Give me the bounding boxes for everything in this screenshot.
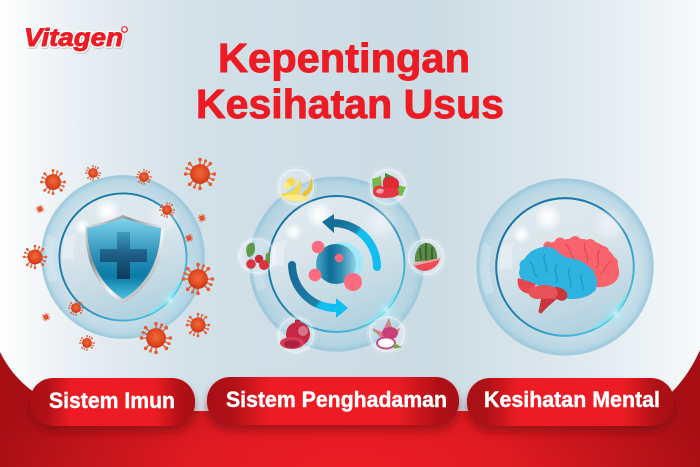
panel: mental health bbox=[477, 179, 653, 355]
brain: blue lobe bbox=[519, 247, 597, 299]
bubble: immune bbox=[42, 176, 204, 338]
icons: virus particles bbox=[23, 158, 216, 354]
label pill: Sistem Imun bbox=[30, 378, 195, 432]
logo: Vitagen: Vitagen bbox=[24, 24, 123, 52]
brain: red base and cerebellum bbox=[518, 278, 567, 313]
icon: banana bubble bbox=[276, 167, 316, 207]
icon: cherry bubble bbox=[237, 236, 277, 276]
brain: red lobe bbox=[543, 236, 619, 287]
logo: Vitagen: Vitagen bbox=[25, 25, 124, 53]
label pill: Sistem Imun: Sistem Imun bbox=[49, 388, 175, 413]
icon: shield with cross bbox=[85, 215, 164, 303]
icon: watermelon bubble bbox=[406, 237, 446, 277]
icon: digestive core with dots bbox=[309, 241, 363, 291]
icon: strawberry bubble bbox=[368, 167, 408, 207]
arrow: lower circular arrow bbox=[292, 265, 348, 318]
label pill: Kesihatan Mental: Kesihatan Mental bbox=[484, 387, 660, 412]
label pill: Kesihatan Mental bbox=[467, 378, 674, 432]
icon: brain bbox=[518, 236, 619, 313]
arrow: upper circular arrow bbox=[322, 214, 377, 267]
bubble: mental bbox=[477, 179, 653, 355]
icon: dragon fruit bubble bbox=[367, 314, 407, 354]
label pill: Sistem Penghadaman: Sistem Penghadaman bbox=[226, 387, 447, 412]
title bbox=[196, 35, 504, 127]
icon: pomegranate bubble bbox=[276, 315, 316, 355]
panel: immune system bbox=[23, 158, 216, 354]
title: Kesihatan Usus bbox=[196, 81, 504, 127]
title: Kepentingan bbox=[218, 35, 470, 81]
panel: digestive system bbox=[237, 167, 446, 355]
logo: Vitagen: Vitagen bbox=[24, 24, 123, 52]
bubble: digestive bbox=[250, 177, 424, 351]
label pill: Sistem Penghadaman bbox=[207, 377, 459, 431]
